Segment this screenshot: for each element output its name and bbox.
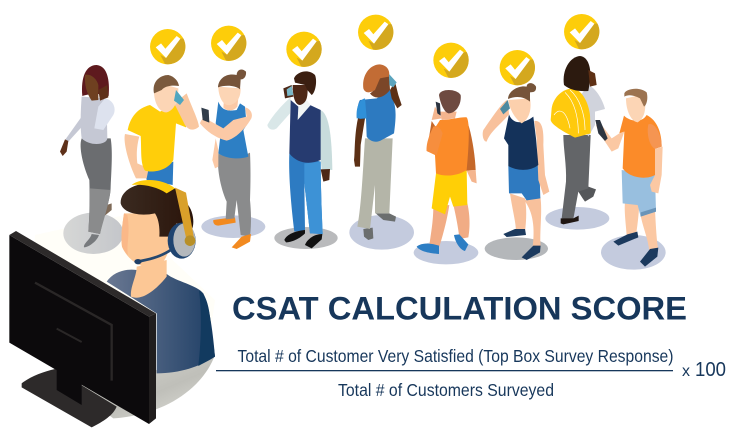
person: man in navy vest <box>267 71 338 249</box>
person: woman in blue shirt and khaki trousers <box>349 64 414 250</box>
person: woman in grey sweater <box>60 65 123 254</box>
icon: check badge 5 <box>433 43 469 78</box>
group: customers right <box>349 56 666 270</box>
person: man in orange shirt and yellow shorts <box>414 90 478 264</box>
person: woman in blue top <box>200 69 265 249</box>
multiplication sign: x <box>682 363 690 380</box>
icon: check badge 6 <box>500 50 535 85</box>
icon: check badge 3 <box>286 32 322 67</box>
desk shadow <box>67 355 215 418</box>
fraction bar <box>216 370 673 371</box>
agent head with headset <box>121 180 196 267</box>
person: woman with yellow backpack <box>545 56 609 230</box>
group: customers left <box>60 65 338 254</box>
title: CSAT CALCULATION SCORE <box>232 290 687 326</box>
icon: check badge 2 <box>211 26 246 61</box>
person: woman in navy top and blue shorts <box>483 83 549 260</box>
call center agent at monitor <box>9 180 215 427</box>
satisfaction check badges <box>150 14 599 85</box>
icon: check badge 1 <box>150 29 185 64</box>
icon: check badge 4 <box>358 15 393 50</box>
multiplier <box>682 359 726 381</box>
person: man in orange shirt and light blue shorts <box>595 89 666 270</box>
denominator: Total # of Customers Surveyed <box>338 380 554 400</box>
factor: 100 <box>695 359 726 381</box>
agent body <box>107 260 215 373</box>
person: man in yellow shirt <box>125 75 199 185</box>
formula <box>216 346 726 400</box>
monitor and stand <box>9 231 156 427</box>
background glow <box>30 215 215 415</box>
numerator: Total # of Customer Very Satisfied (Top Box Survey Response) <box>238 346 674 366</box>
icon: check badge 7 <box>564 14 599 49</box>
